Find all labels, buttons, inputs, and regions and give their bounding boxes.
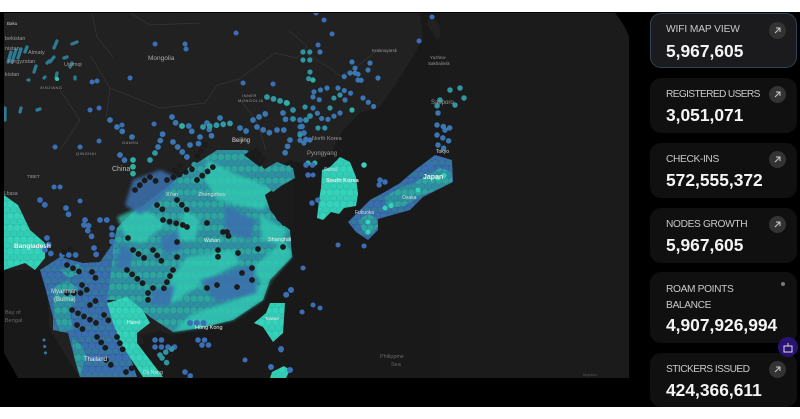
map panel [4, 13, 629, 378]
hex layer: Myanmar teal strip [53, 264, 86, 377]
value: 5,967,605 [666, 41, 743, 61]
value: 3,051,071 [666, 105, 743, 125]
icon: arrow [769, 361, 786, 378]
card: check-ins [650, 143, 797, 198]
South Korea [317, 157, 358, 220]
map labels: Baku [7, 21, 18, 26]
map labels: Almaty [28, 50, 45, 56]
icon: assistant robot button [778, 337, 798, 357]
Honshu north and Hokkaido chain [376, 88, 464, 186]
map labels: Fukuoka [355, 210, 374, 216]
value: 424,366,611 [666, 380, 762, 400]
map labels: Wuhan [204, 238, 220, 244]
map labels: Da Nang [143, 370, 163, 376]
map labels: Krasnoyarsk [372, 48, 398, 53]
map labels: Taiwan [265, 316, 280, 321]
map labels: Kyrgyzstan [8, 59, 35, 65]
hex layer: dots around Taiwan [190, 290, 291, 370]
hex layer: Taiwan and Philippines [254, 303, 290, 378]
Japan main islands [348, 155, 453, 240]
hex layer: Gulf of Tonkin dots [44, 340, 214, 378]
map labels: Bengal [5, 318, 22, 324]
hex layer: Vietnam teal [107, 297, 163, 377]
label [666, 284, 734, 311]
map labels: XINJIANG [40, 85, 62, 90]
blue patches in China [115, 170, 257, 305]
map labels [4, 21, 597, 377]
China bright teal patches [117, 160, 292, 332]
map labels: (Burma) [54, 297, 76, 303]
hex layer: South Asia teal [4, 195, 45, 270]
value: 4,907,926,994 [666, 315, 777, 335]
map labels: Tokyo [436, 149, 449, 155]
value: 572,555,372 [666, 170, 763, 190]
map labels: Urumqi [64, 62, 82, 68]
China main mass [107, 150, 293, 332]
map labels: Pyongyang [307, 151, 337, 157]
hex layer: South Asia blue edge [40, 200, 112, 260]
card: nodes growth [650, 208, 797, 263]
map labels: QINGHAI [76, 151, 96, 156]
map labels: GANSU [122, 140, 139, 145]
label: ROAM POINTS [666, 284, 733, 295]
Korea side dots [306, 165, 364, 203]
Southeast Asia dark holes [64, 248, 132, 372]
map labels: Myanmar [51, 289, 76, 295]
hex layer: north-east China chains [300, 52, 379, 163]
map labels: Mongolia [148, 55, 175, 62]
Gulf of Tonkin cutout [141, 331, 180, 378]
map labels: Osaka [402, 195, 417, 201]
label: WIFI MAP VIEW [666, 24, 740, 35]
label: NODES GROWTH [666, 219, 747, 230]
map base land and sea [4, 13, 629, 378]
map labels: Japan [423, 174, 443, 181]
map labels: Hong Kong [195, 325, 223, 331]
map labels: Yuzhno- [430, 55, 447, 60]
map labels: kistan [5, 72, 19, 78]
map labels: Shanghai [268, 237, 291, 243]
label: REGISTERED USERS [666, 89, 760, 100]
map labels: Mapbox [583, 372, 597, 377]
map labels: China [112, 166, 130, 173]
card: wifi map view [650, 13, 797, 68]
map labels: Lhasa [4, 191, 18, 197]
hex layer: Shandong teal [263, 162, 295, 192]
map labels: bekistan [5, 36, 26, 42]
label: STICKERS ISSUED [666, 364, 749, 375]
map labels: Sea [391, 362, 402, 368]
card: roam points balance [650, 272, 797, 343]
map labels: INNER [242, 93, 257, 98]
map labels: Zhengzhou [198, 192, 226, 198]
map labels: nistan [5, 46, 20, 52]
map labels: Beijing [232, 138, 250, 144]
value: 5,967,605 [666, 235, 743, 255]
map labels: Bay of [5, 310, 21, 316]
hex layer: scattered blue dots [54, 13, 432, 360]
hex layer: Myanmar and Yunnan [40, 243, 137, 377]
map labels: Thailand [84, 357, 107, 363]
label: CHECK-INS [666, 154, 719, 165]
map labels: Sakhalinsk [428, 61, 451, 66]
map labels: Xi'an [166, 192, 178, 198]
map labels: North Korea [312, 136, 343, 142]
card: stickers issued [650, 353, 797, 407]
north China edge gap [244, 152, 285, 226]
map labels: TIBET [27, 174, 40, 179]
Japan bright spots [368, 175, 445, 232]
hex layer: north China sparse chains [110, 97, 310, 177]
map labels: Seoul [324, 167, 337, 173]
label: BALANCE [666, 300, 711, 311]
dark holes in China [127, 145, 284, 302]
hex layer: central Asia sparse streaks [5, 41, 77, 120]
card: registered users [650, 78, 797, 133]
icon: arrow [769, 86, 786, 103]
map labels: Philippine [380, 354, 404, 360]
map labels: South Korea [326, 178, 360, 184]
map labels: Bangladesh [14, 243, 51, 250]
map labels: MONGOLIA [238, 98, 264, 103]
icon: small dot [781, 282, 785, 286]
icon: arrow [769, 151, 786, 168]
Japan teal highlights [358, 168, 452, 234]
map labels: Sapporo [431, 100, 454, 106]
icon: arrow [769, 22, 786, 39]
icon: arrow [769, 216, 786, 233]
map labels: Hanoi [127, 320, 140, 326]
